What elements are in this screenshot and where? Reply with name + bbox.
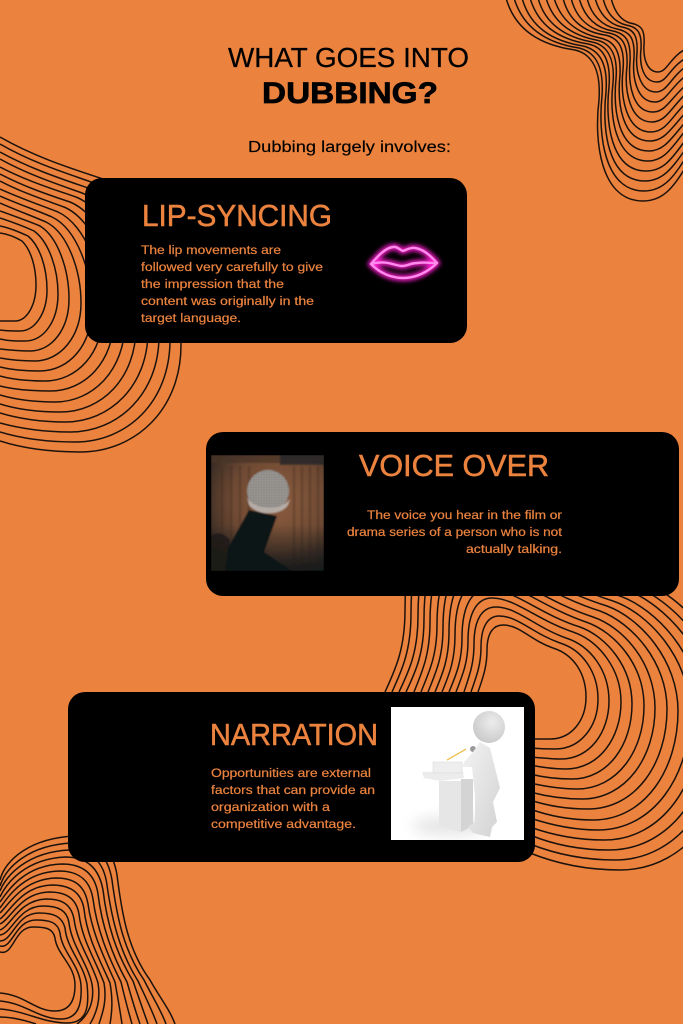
text block: voice over bbox=[347, 508, 563, 556]
contour lines: right middle bbox=[385, 508, 683, 870]
text block: voice over: The voice you hear in the film or bbox=[367, 508, 562, 522]
text block: lip-syncing: the impression that the bbox=[141, 277, 284, 291]
text block: narration: competitive advantage. bbox=[211, 817, 356, 831]
heading: lip-syncing: LIP-SYNCING bbox=[142, 199, 332, 233]
text block: narration: Opportunities are external bbox=[211, 766, 371, 780]
text block: narration: factors that can provide an bbox=[211, 783, 375, 797]
text block: lip-syncing bbox=[141, 243, 323, 325]
text block: lip-syncing: content was originally in the bbox=[141, 294, 314, 308]
title bbox=[228, 42, 469, 110]
text block: voice over: actually talking. bbox=[466, 542, 562, 556]
title: WHAT GOES INTO bbox=[228, 42, 469, 73]
contour lines: top right bbox=[506, 0, 683, 201]
text block: narration: organization with a bbox=[211, 800, 330, 814]
text block: lip-syncing: The lip movements are bbox=[141, 243, 281, 257]
heading: voice over: VOICE OVER bbox=[359, 449, 549, 483]
text block: narration bbox=[211, 766, 375, 831]
text block: lip-syncing: target language. bbox=[141, 311, 241, 325]
contour lines: left bbox=[0, 137, 181, 452]
subtitle: Dubbing largely involves: bbox=[248, 139, 451, 156]
icon: neon lips bbox=[371, 247, 437, 278]
image: figure at podium bbox=[391, 707, 524, 840]
panel: voice over bbox=[206, 432, 679, 596]
text block: lip-syncing: followed very carefully to give bbox=[141, 260, 323, 274]
image: microphone bbox=[211, 455, 324, 571]
heading: narration: NARRATION bbox=[210, 718, 378, 752]
text block: voice over: drama series of a person who is not bbox=[347, 525, 563, 539]
contour lines: bottom left bbox=[0, 836, 175, 1024]
panel: lip-syncing bbox=[85, 178, 467, 343]
title: DUBBING? bbox=[262, 77, 438, 110]
panel: narration bbox=[68, 692, 535, 862]
